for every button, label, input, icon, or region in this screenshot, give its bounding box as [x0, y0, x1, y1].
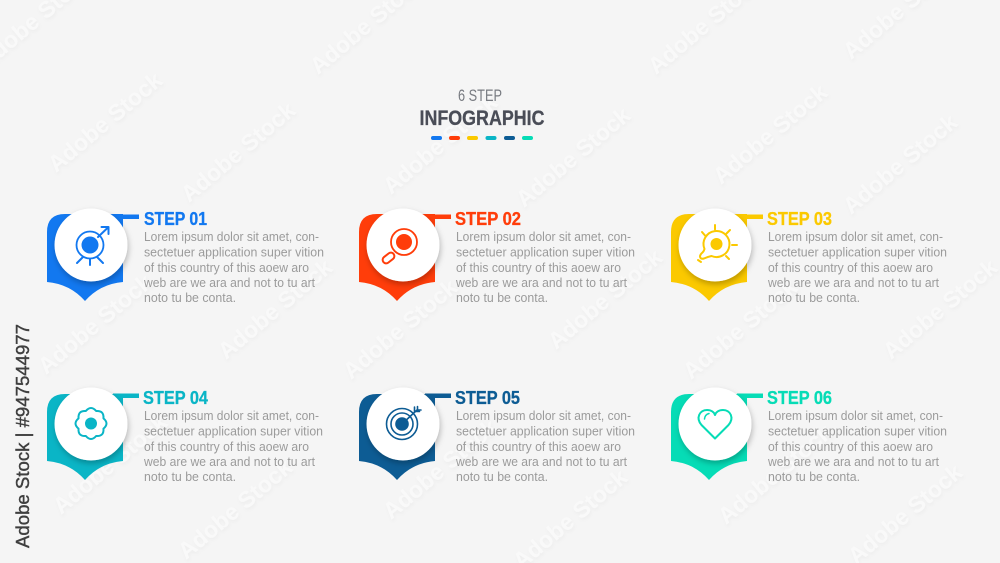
body text: noto tu be conta. — [144, 470, 236, 484]
marker shape — [359, 214, 435, 301]
body text: web are we ara and not to tu art — [143, 455, 315, 469]
white circle — [54, 208, 128, 282]
body text: of this country of this aoew aro — [144, 440, 309, 454]
body text: noto tu be conta. — [456, 470, 548, 484]
connector bar — [425, 394, 451, 398]
watermark pattern: Adobe Stock — [838, 109, 962, 219]
marker shape — [47, 394, 123, 480]
icon: gear badge — [76, 408, 106, 439]
step heading: STEP 04 — [143, 388, 208, 408]
white circle — [54, 388, 128, 460]
body text — [143, 409, 323, 484]
watermark pattern: Adobe Stock — [173, 454, 297, 563]
body text: of this country of this aoew aro — [456, 440, 621, 454]
body text: sectetuer application super vition — [144, 424, 323, 438]
body text: noto tu be conta. — [456, 291, 548, 305]
body text: web are we ara and not to tu art — [767, 276, 939, 290]
body text: of this country of this aoew aro — [768, 440, 933, 454]
body text: sectetuer application super vition — [768, 424, 947, 438]
title line: 6 step: 6 STEP — [458, 86, 502, 105]
body text: noto tu be conta. — [768, 291, 860, 305]
body text: Lorem ipsum dolor sit amet, con- — [144, 230, 319, 244]
connector bar — [113, 214, 139, 219]
panel: step 04 — [47, 388, 323, 484]
watermark pattern: Adobe Stock — [708, 79, 832, 189]
step heading: STEP 02 — [455, 209, 521, 229]
white circle — [678, 208, 752, 282]
body text: web are we ara and not to tu art — [455, 276, 627, 290]
step heading: STEP 06 — [767, 388, 832, 408]
icon: bullseye with arrow — [386, 406, 421, 440]
body text: web are we ara and not to tu art — [455, 455, 627, 469]
body text: sectetuer application super vition — [768, 246, 947, 260]
body text: web are we ara and not to tu art — [767, 455, 939, 469]
icon: target with arrow — [76, 227, 108, 265]
watermark pattern: Adobe Stock — [213, 254, 337, 364]
marker shape — [671, 394, 747, 480]
step heading: STEP 05 — [455, 388, 520, 408]
watermark pattern: Adobe Stock — [678, 274, 802, 384]
icon: heart — [699, 410, 731, 438]
body text — [455, 230, 635, 305]
panel: step 03 — [671, 208, 947, 305]
icon: light bulb — [698, 225, 737, 262]
panel: step 01 — [47, 208, 324, 305]
watermark pattern: Adobe Stock — [543, 244, 667, 354]
body text: sectetuer application super vition — [456, 424, 635, 438]
title line: infographic: INFOGRAPHIC — [420, 107, 544, 130]
connector bar — [113, 394, 139, 398]
body text: Lorem ipsum dolor sit amet, con- — [144, 409, 319, 423]
watermark pattern: Adobe Stock — [43, 67, 167, 177]
watermark pattern: Adobe Stock — [33, 269, 157, 379]
colour dashes — [431, 136, 533, 140]
marker shape — [359, 394, 435, 480]
watermark pattern: Adobe Stock — [878, 254, 1000, 364]
watermark pattern: Adobe Stock — [378, 89, 502, 199]
body text — [455, 409, 635, 484]
body text: noto tu be conta. — [144, 291, 236, 305]
panel: step 06 — [671, 388, 947, 484]
body text: web are we ara and not to tu art — [143, 276, 315, 290]
connector bar — [425, 214, 451, 219]
body text: sectetuer application super vition — [456, 246, 635, 260]
step heading: STEP 01 — [144, 209, 207, 229]
watermark pattern: Adobe Stock — [338, 274, 462, 384]
white circle — [366, 388, 440, 460]
body text: Lorem ipsum dolor sit amet, con- — [456, 409, 631, 423]
body text: of this country of this aoew aro — [456, 261, 621, 275]
stock id label: Adobe Stock | #947544977 — [13, 324, 33, 548]
body text: Lorem ipsum dolor sit amet, con- — [768, 409, 943, 423]
watermark pattern: Adobe Stock — [176, 97, 300, 207]
body text — [767, 230, 947, 305]
watermark pattern: Adobe Stock — [511, 102, 635, 212]
marker shape — [671, 214, 747, 301]
white circle — [678, 388, 752, 460]
connector bar — [737, 214, 763, 219]
body text — [143, 230, 324, 305]
body text: Lorem ipsum dolor sit amet, con- — [456, 230, 631, 244]
body text: sectetuer application super vition — [144, 246, 324, 260]
white circle — [366, 208, 440, 282]
marker shape — [47, 214, 123, 301]
body text: noto tu be conta. — [768, 470, 860, 484]
watermark pattern: Adobe Stock — [378, 414, 502, 524]
connector bar — [737, 394, 763, 398]
body text: Lorem ipsum dolor sit amet, con- — [768, 230, 943, 244]
panel: step 02 — [359, 208, 635, 305]
body text: of this country of this aoew aro — [144, 261, 309, 275]
body text: of this country of this aoew aro — [768, 261, 933, 275]
watermark pattern: Adobe Stock — [48, 409, 172, 519]
body text — [767, 409, 947, 484]
panel: step 05 — [359, 388, 635, 484]
icon: magnifier — [381, 229, 417, 265]
step heading: STEP 03 — [767, 209, 832, 229]
watermark pattern: Adobe Stock — [713, 419, 837, 529]
title — [420, 86, 544, 140]
